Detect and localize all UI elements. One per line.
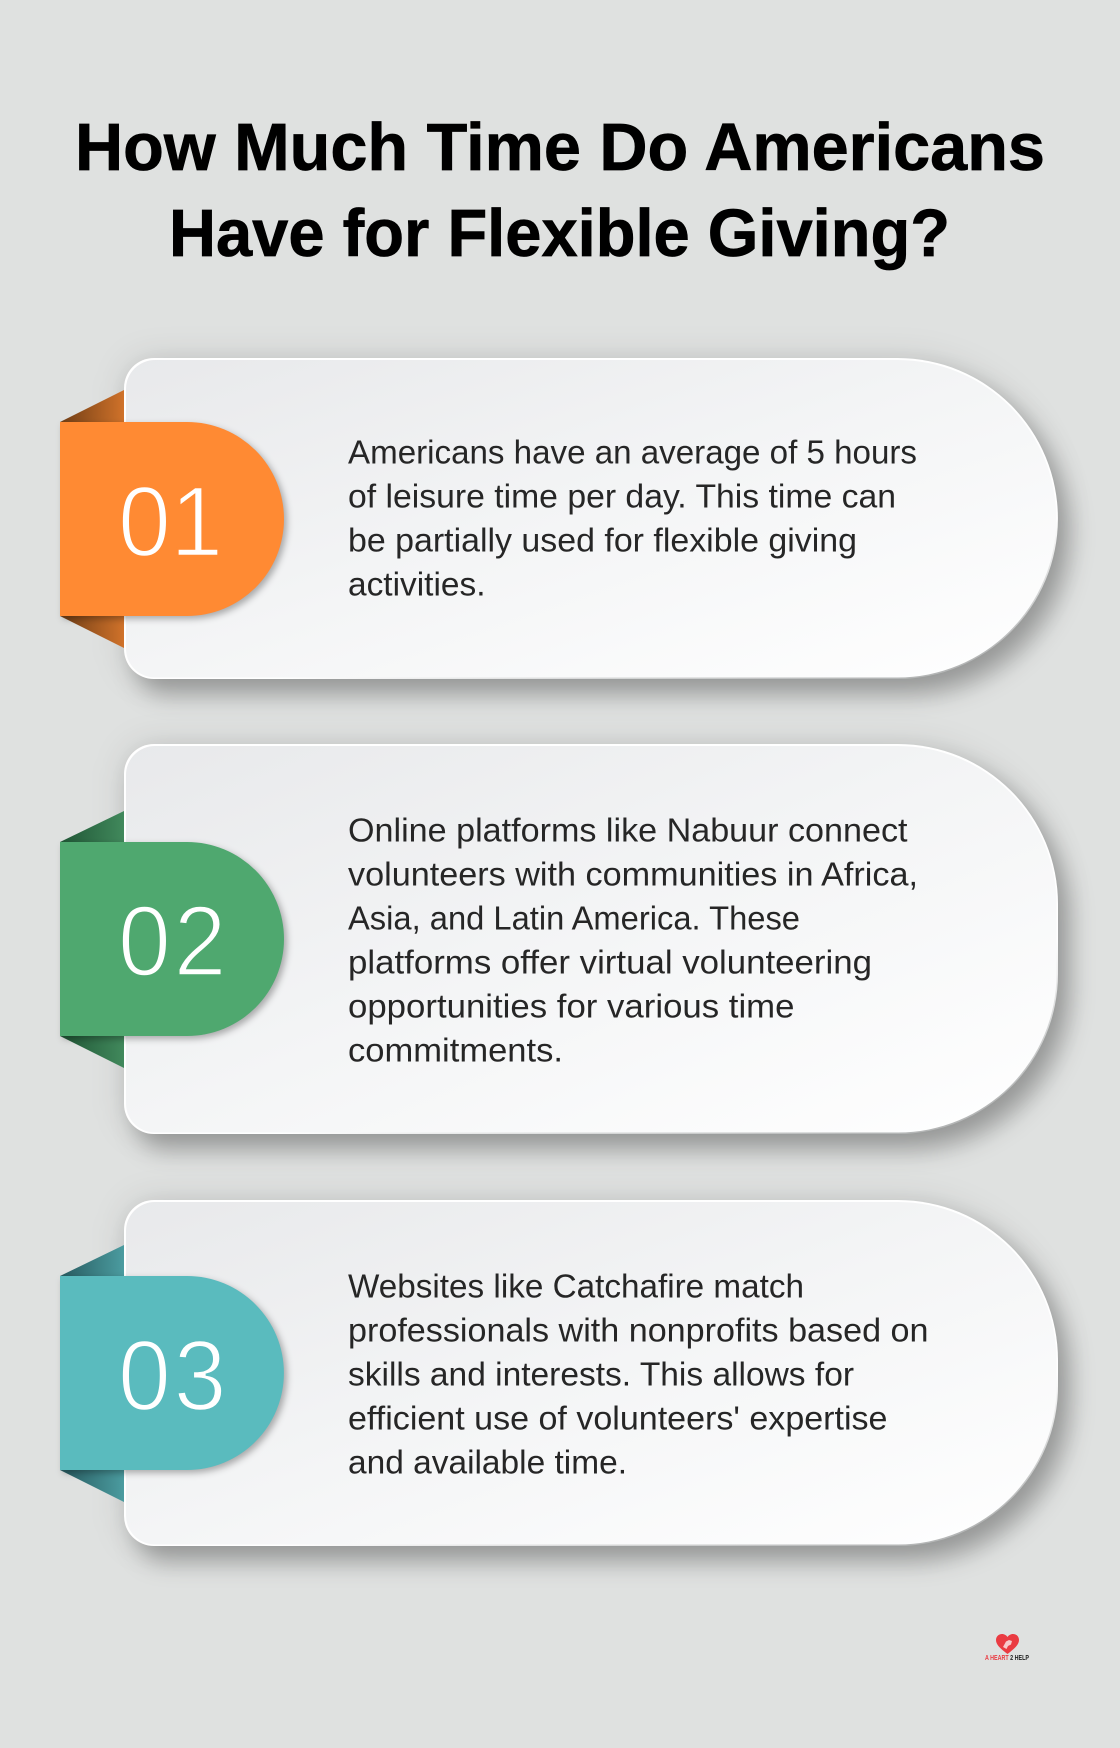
number tab 01: [60, 422, 287, 619]
panel: step 03: [60, 1200, 1070, 1562]
text block 01: Americans have an average of 5 hours: [348, 434, 917, 470]
number tab 02: 02: [118, 885, 226, 997]
text block 03: skills and interests. This allows for: [348, 1356, 854, 1392]
ribbon folds 01: [60, 390, 124, 648]
text block 02: commitments.: [348, 1032, 563, 1068]
icon: heart: [996, 1634, 1019, 1654]
title: [75, 110, 1045, 271]
title: How Much Time Do Americans: [75, 110, 1045, 185]
text block 02: Asia, and Latin America. These: [348, 900, 800, 936]
text block 03: and available time.: [348, 1444, 627, 1480]
panel: step 01: [60, 358, 1070, 695]
number tab 01: 01: [118, 466, 223, 578]
number tab 03: 03: [118, 1320, 226, 1432]
text block 02: [348, 812, 918, 1068]
card shape 03: [124, 1200, 1070, 1562]
text block 03: professionals with nonprofits based on: [348, 1312, 928, 1348]
logo: A Heart 2 Help: [985, 1634, 1029, 1662]
text block 03: efficient use of volunteers' expertise: [348, 1400, 888, 1436]
text block 03: Websites like Catchafire match: [348, 1268, 804, 1304]
text block 01: of leisure time per day. This time can: [348, 478, 896, 514]
text block 02: platforms offer virtual volunteering: [348, 944, 872, 980]
number tab 03: [60, 1276, 287, 1473]
card shape 01: [124, 358, 1070, 695]
card shape 02: [124, 744, 1070, 1150]
panel: step 02: [60, 744, 1070, 1150]
text block 02: volunteers with communities in Africa,: [348, 856, 918, 892]
title: Have for Flexible Giving?: [169, 196, 950, 271]
number tab 02: [60, 842, 287, 1039]
logo wordmark: A HEART 2 HELP: [985, 1655, 1029, 1662]
text block 01: be partially used for flexible giving: [348, 522, 857, 558]
text block 01: [348, 434, 917, 602]
text block 02: Online platforms like Nabuur connect: [348, 812, 908, 848]
text block 02: opportunities for various time: [348, 988, 794, 1024]
text block 01: activities.: [348, 566, 486, 602]
text block 03: [348, 1268, 928, 1480]
ribbon folds 03: [60, 1245, 124, 1502]
ribbon folds 02: [60, 811, 124, 1068]
